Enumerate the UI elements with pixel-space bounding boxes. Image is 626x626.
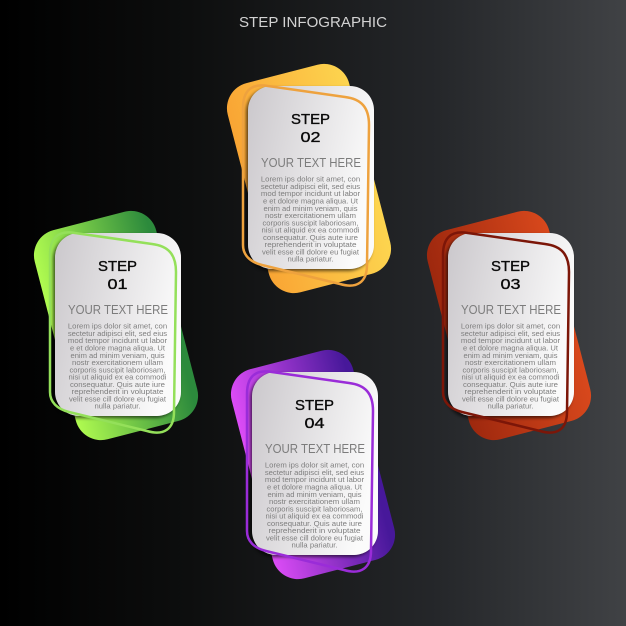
panel: step 04	[225, 344, 401, 585]
body text	[261, 175, 361, 264]
body text: velit esse cill dolore eu fugiat	[69, 394, 166, 403]
body text: e et dolore magna aliqua. Ut	[70, 344, 165, 352]
card shadow	[250, 374, 376, 557]
step heading: STEP	[98, 258, 137, 275]
white card	[55, 233, 181, 416]
body text	[461, 322, 561, 411]
body text: enim ad minim veniam, quis	[268, 490, 362, 499]
body text: mod tempor incidunt ut labor	[461, 336, 561, 345]
body text: Lorem ips dolor sit amet, con	[265, 461, 364, 470]
body text: nostr exercitationem ullam	[265, 211, 356, 220]
green rotated shape	[28, 205, 204, 446]
outline frame	[50, 232, 176, 433]
body text: reprehenderit in voluptate	[268, 526, 360, 535]
subheading: YOUR TEXT HERE	[461, 303, 561, 317]
body text: consequatur. Quis aute iure	[70, 380, 165, 389]
outline frame	[443, 232, 569, 433]
subheading: YOUR TEXT HERE	[265, 442, 365, 456]
card shadow	[246, 88, 372, 271]
body text: reprehenderit in voluptate	[464, 387, 556, 396]
body text: velit esse cill dolore eu fugiat	[462, 394, 559, 403]
body text: sectetur adipisci elit, sed eius	[68, 329, 167, 338]
body text: Lorem ips dolor sit amet, con	[68, 322, 167, 331]
panel: step 03	[421, 205, 597, 446]
body text: corporis suscipit laboriosam,	[266, 504, 362, 513]
body text: velit esse cill dolore eu fugiat	[262, 247, 359, 256]
outline frame	[247, 371, 373, 572]
card shadow	[53, 235, 179, 418]
step heading: STEP	[295, 397, 334, 414]
body text: consequatur. Quis aute iure	[463, 380, 558, 389]
body text: nisi ut aliquid ex ea commodi	[262, 226, 360, 235]
body text: sectetur adipisci elit, sed eius	[461, 329, 560, 338]
body text: nulla pariatur.	[288, 255, 334, 264]
body text: nulla pariatur.	[94, 402, 140, 411]
body text: corporis suscipit laboriosam,	[462, 365, 558, 374]
outline frame	[243, 85, 369, 286]
white card	[252, 372, 378, 555]
body text: mod tempor incidunt ut labor	[68, 336, 168, 345]
body text: consequatur. Quis aute iure	[267, 519, 362, 528]
body text: nisi ut aliquid ex ea commodi	[68, 373, 167, 382]
body text: Lorem ips dolor sit amet, con	[261, 175, 360, 184]
body text: nisi ut aliquid ex ea commodi	[266, 512, 364, 521]
body text: enim ad minim veniam, quis	[70, 351, 165, 360]
step number: 02	[300, 129, 320, 146]
step number: 01	[108, 276, 128, 293]
body text: e et dolore magna aliqua. Ut	[267, 482, 362, 492]
panel: step 01	[28, 205, 204, 446]
card shadow	[446, 235, 572, 418]
step heading: STEP	[291, 111, 330, 128]
body text: nostr exercitationem ullam	[72, 358, 163, 367]
body text: enim ad minim veniam, quis	[264, 204, 358, 213]
white card	[448, 233, 574, 416]
body text: corporis suscipit laboriosam,	[70, 365, 166, 374]
body text: velit esse cill dolore eu fugiat	[266, 533, 363, 542]
white card	[248, 86, 374, 269]
subheading: YOUR TEXT HERE	[68, 303, 168, 317]
body text: nostr exercitationem ullam	[269, 497, 360, 506]
purple rotated shape	[225, 344, 401, 585]
body text: consequatur. Quis aute iure	[263, 233, 358, 242]
body text: corporis suscipit laboriosam,	[262, 218, 358, 227]
body text: mod tempor incidunt ut labor	[261, 189, 361, 198]
step number: 04	[304, 415, 324, 432]
body text	[68, 322, 168, 411]
body text: enim ad minim veniam, quis	[464, 351, 558, 360]
body text: reprehenderit in voluptate	[264, 240, 356, 249]
step heading: STEP	[491, 258, 530, 275]
body text: nostr exercitationem ullam	[465, 358, 556, 367]
body text: nisi ut aliquid ex ea commodi	[462, 373, 560, 382]
body text: sectetur adipisci elit, sed eius	[265, 468, 364, 477]
body text: nulla pariatur.	[292, 541, 338, 550]
step number: 03	[500, 276, 520, 293]
body text: e et dolore magna aliqua. Ut	[263, 196, 358, 206]
body text	[265, 461, 365, 550]
body text: nulla pariatur.	[488, 402, 534, 411]
red rotated shape	[421, 205, 597, 446]
body text: sectetur adipisci elit, sed eius	[261, 182, 360, 191]
body text: Lorem ips dolor sit amet, con	[461, 322, 560, 331]
body text: e et dolore magna aliqua. Ut	[463, 344, 558, 352]
body text: mod tempor incidunt ut labor	[265, 475, 365, 484]
yellow rotated shape	[221, 58, 397, 299]
subheading: YOUR TEXT HERE	[261, 156, 361, 170]
body text: reprehenderit in voluptate	[72, 387, 164, 396]
title: STEP INFOGRAPHIC	[239, 14, 387, 31]
panel: step 02	[221, 58, 397, 299]
